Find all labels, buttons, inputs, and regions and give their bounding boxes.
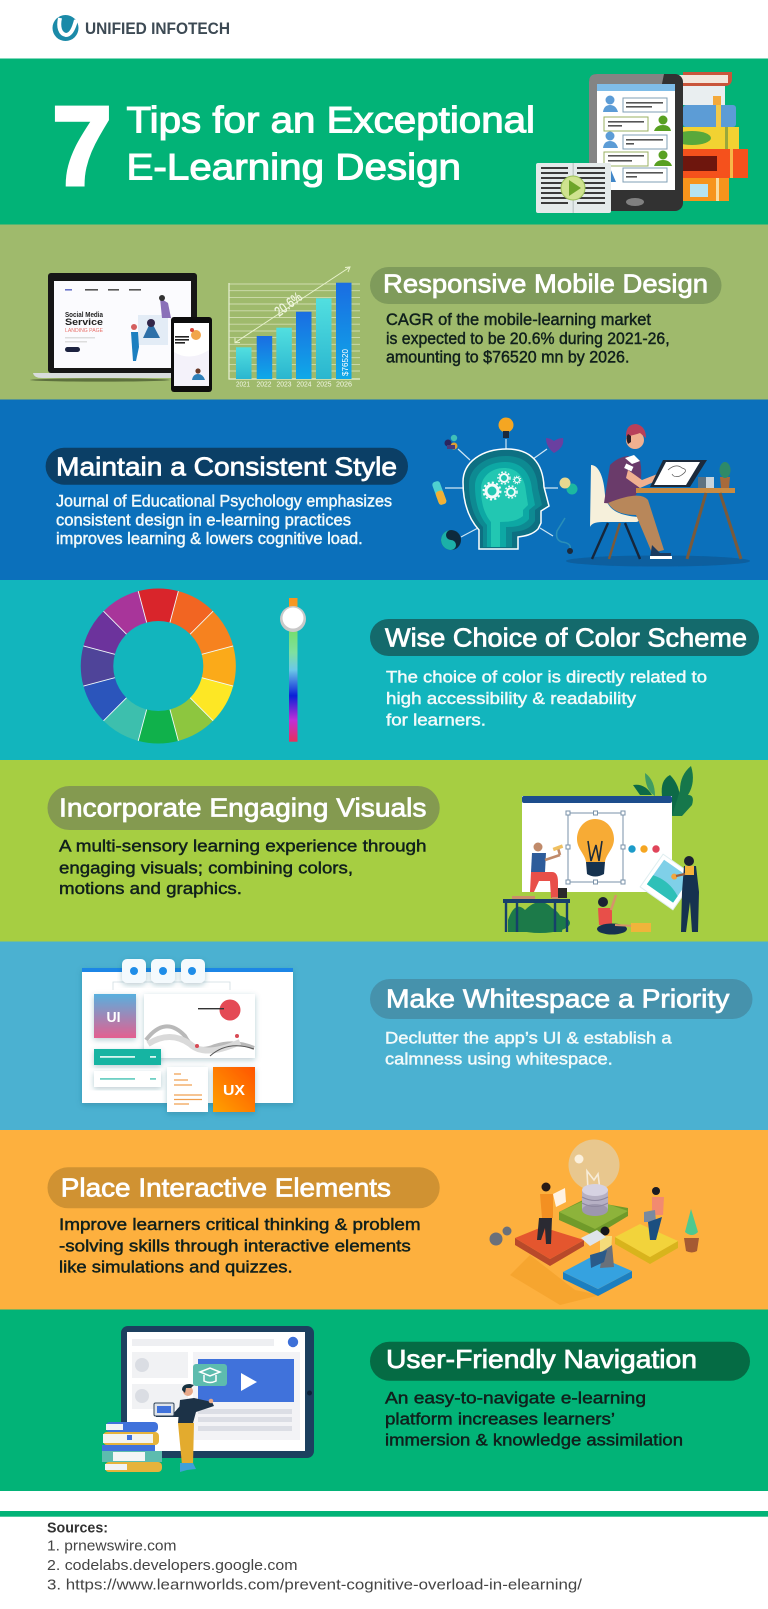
heading pill: Wise Choice of Color Scheme — [385, 623, 747, 653]
heading pill: Place Interactive Elements — [61, 1173, 391, 1203]
body text: like simulations and quizzes. — [59, 1259, 293, 1277]
illustration: laptop and phone: Service — [65, 317, 103, 327]
image card — [144, 994, 255, 1058]
heading pill: Incorporate Engaging Visuals — [59, 793, 426, 823]
bar chart: market growth 2021-2026: 2023 — [276, 380, 292, 389]
table and bush — [503, 899, 570, 933]
header: logo band — [0, 0, 768, 58]
body text: Declutter the app’s UI & establish a — [385, 1029, 673, 1047]
illustration: tablet course screen with presenter — [102, 1326, 314, 1472]
icon: pills — [560, 478, 578, 494]
body text — [386, 669, 707, 729]
seated person with laptop — [581, 1226, 614, 1268]
title: Tips for an Exceptional — [126, 100, 535, 141]
light bulb — [568, 1140, 620, 1190]
seated woman — [597, 895, 651, 934]
body text — [385, 1029, 673, 1068]
heading pill: Maintain a Consistent Style — [56, 451, 397, 481]
icon: heart shield — [546, 438, 563, 453]
sources: 1. prnewswire.com — [47, 1539, 176, 1555]
heading pill: User-Friendly Navigation — [386, 1344, 697, 1374]
big numeral 7: 7 — [52, 84, 112, 208]
heading pill — [48, 786, 440, 830]
sources: 3. https://www.learnworlds.com/prevent-cognitive-overload-in-elearning/ — [47, 1577, 583, 1593]
plant — [684, 1209, 699, 1252]
body text: Journal of Educational Psychology emphasizes — [56, 493, 392, 511]
panel: Make Whitespace a Priority — [0, 942, 768, 1130]
body text: The choice of color is directly related to — [386, 669, 707, 687]
body text: An easy-to-navigate e-learning — [385, 1389, 646, 1407]
open e-book with play button — [536, 163, 611, 213]
color wheel — [81, 588, 236, 744]
illustration: designer at desk — [590, 424, 741, 559]
red puzzle piece — [515, 1238, 584, 1266]
person at laptop — [644, 1187, 664, 1240]
body text: motions and graphics. — [59, 880, 242, 898]
title: E-Learning Design — [126, 146, 461, 187]
heading pill — [370, 1342, 750, 1381]
body text — [56, 493, 392, 548]
body text — [386, 311, 670, 367]
slide board — [522, 796, 672, 892]
tab buttons — [122, 959, 205, 983]
body text: CAGR of the mobile-learning market — [386, 311, 651, 329]
body text: immersion & knowledge assimilation — [385, 1432, 683, 1450]
body text: Improve learners critical thinking & problem — [59, 1216, 421, 1234]
yellow puzzle piece — [615, 1237, 678, 1264]
body text: A multi-sensory learning experience through — [59, 838, 426, 856]
blue puzzle piece — [563, 1271, 632, 1296]
illustration: team building a slide — [503, 766, 699, 934]
bar chart: market growth 2021-2026: 2024 — [296, 379, 312, 388]
graduation cap bubble — [193, 1364, 227, 1386]
body text: amounting to $76520 mn by 2026. — [386, 349, 629, 367]
green puzzle piece — [559, 1200, 628, 1236]
bulb base — [582, 1184, 608, 1216]
body text: improves learning & lowers cognitive load. — [56, 530, 363, 548]
illustration: UI and UX window — [82, 959, 293, 1112]
bar chart: market growth 2021-2026: 2021 — [236, 380, 250, 389]
stack of books — [102, 1422, 162, 1472]
illustration: tablet, books and e-book — [536, 72, 748, 213]
icon: stethoscope — [557, 518, 570, 550]
logo wordmark: UNIFIED INFOTECH — [85, 20, 230, 38]
bar chart: market growth 2021-2026: 2026 — [336, 379, 352, 388]
title — [126, 100, 535, 187]
illustration: laptop and phone — [30, 273, 212, 392]
panel: Maintain a Consistent Style — [0, 400, 768, 580]
video player — [198, 1359, 294, 1402]
body text: for learners. — [386, 711, 486, 729]
illustration: laptop and phone: LANDING PAGE — [65, 328, 103, 334]
body text: consistent design in e-learning practices — [56, 511, 351, 529]
bars — [94, 1049, 161, 1087]
sources: Sources: — [47, 1520, 108, 1536]
panel: Incorporate Engaging Visuals — [0, 760, 768, 942]
body text — [59, 1216, 421, 1277]
body text: calmness using whitespace. — [385, 1050, 613, 1068]
heading pill — [48, 1167, 440, 1208]
chat rows — [603, 96, 672, 182]
presenter — [154, 1384, 214, 1472]
UX card: UX — [223, 1082, 245, 1099]
UI card — [94, 994, 136, 1038]
body text: engaging visuals; combining colors, — [59, 859, 353, 877]
sources — [47, 1520, 583, 1593]
shadow — [566, 556, 750, 566]
bar chart: market growth 2021-2026: 2025 — [316, 379, 332, 388]
leaves — [633, 766, 693, 816]
panel: title banner — [0, 58, 768, 224]
icon: capsules — [444, 435, 458, 450]
bar chart: market growth 2021-2026: 2022 — [256, 380, 272, 389]
body text: platform increases learners’ — [385, 1411, 615, 1429]
UI card: UI — [106, 1009, 120, 1026]
icon: yin yang — [441, 530, 461, 550]
footer rule — [0, 1511, 768, 1517]
gears — [490, 1226, 512, 1246]
panel: Place Interactive Elements — [0, 1130, 768, 1310]
body text: high accessibility & readability — [386, 690, 637, 708]
UX card — [213, 1067, 255, 1112]
standing person — [537, 1182, 566, 1244]
color slider — [280, 598, 306, 742]
icon: test tube — [431, 480, 447, 506]
body text — [59, 838, 426, 898]
bar chart: market growth 2021-2026: 20.6% — [271, 289, 305, 319]
heading pill: Responsive Mobile Design — [383, 269, 708, 299]
painter — [512, 842, 567, 899]
photo card — [640, 854, 696, 910]
illustration: puzzle teamwork — [490, 1140, 699, 1305]
icon: light bulb — [498, 418, 514, 438]
body text — [385, 1389, 683, 1450]
document card — [167, 1067, 208, 1112]
heading pill — [370, 979, 752, 1019]
standing woman — [676, 856, 699, 932]
panel: User-Friendly Navigation — [0, 1310, 768, 1491]
panel: Wise Choice of Color Scheme — [0, 580, 768, 760]
body text: is expected to be 20.6% during 2021-26, — [386, 330, 670, 348]
icon: Unified Infotech logo — [52, 15, 78, 41]
light bulb with selection box — [566, 811, 625, 884]
bar chart: market growth 2021-2026: $76520 — [341, 348, 350, 376]
heading pill: Make Whitespace a Priority — [386, 983, 729, 1013]
panel: Responsive Mobile Design — [0, 224, 768, 400]
illustration: laptop and phone: Social Media — [65, 310, 104, 319]
bar chart: market growth 2021-2026 — [229, 267, 360, 389]
body text: -solving skills through interactive elements — [59, 1238, 411, 1256]
sources: 2. codelabs.developers.google.com — [47, 1558, 298, 1574]
illustration: head with gears and icons — [431, 418, 750, 566]
